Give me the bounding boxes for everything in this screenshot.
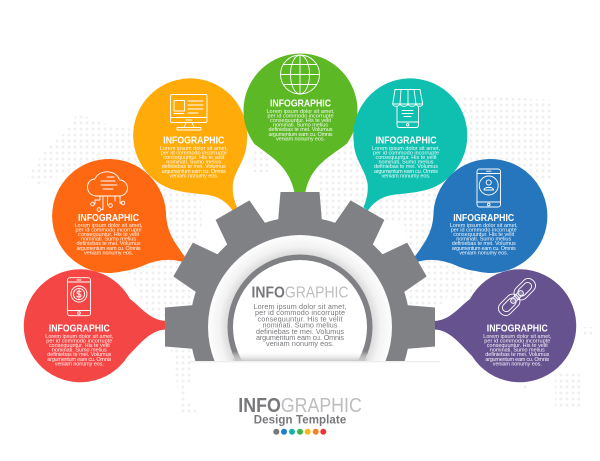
blue pin shape bbox=[412, 159, 547, 273]
heading: INFOGRAPHIC bbox=[270, 97, 331, 109]
panel: purple step bbox=[434, 269, 576, 382]
purple pin shape bbox=[434, 269, 576, 382]
text block: veniam nonumy eos. bbox=[84, 250, 133, 256]
text block bbox=[74, 223, 143, 256]
text block: veniam nonumy eos. bbox=[169, 173, 219, 179]
text block: consequuntur. His te velit bbox=[163, 155, 225, 161]
text block: argumentum eam cu. Omnis bbox=[76, 246, 141, 252]
gear text block: nominati. Sumo melius bbox=[262, 321, 338, 330]
icon: shop storefront bbox=[393, 90, 423, 128]
icon: globe bbox=[280, 55, 320, 94]
text block: nominati. Sumo melius bbox=[378, 160, 434, 166]
text block: definiebas te mei. Volumus bbox=[485, 352, 550, 358]
text block: per id commodo incorrupte bbox=[484, 339, 550, 345]
text block: veniam nonumy eos. bbox=[382, 173, 431, 179]
panel: amber step bbox=[133, 78, 247, 211]
panel: teal step bbox=[353, 78, 467, 211]
text block: definiebas te mei. Volumus bbox=[76, 241, 141, 247]
panel: green step bbox=[244, 54, 358, 195]
gear text block: argumentum eam cu. Omnis bbox=[256, 333, 344, 342]
text block: argumentum eam cu. Omnis bbox=[162, 169, 226, 175]
text block: consequuntur. His te velit bbox=[376, 155, 437, 161]
gear text block: Lorem ipsum dolor sit amet, bbox=[254, 302, 346, 311]
text block: argumentum eam cu. Omnis bbox=[268, 132, 333, 138]
text block: definiebas te mei. Volumus bbox=[268, 127, 333, 133]
text block bbox=[45, 334, 114, 367]
text block: per id commodo incorrupte bbox=[373, 151, 439, 157]
text block: definiebas te mei. Volumus bbox=[452, 241, 516, 247]
text block: nominati. Sumo melius bbox=[81, 237, 136, 243]
text block bbox=[483, 334, 552, 367]
gear text block bbox=[254, 302, 346, 348]
text block: definiebas te mei. Volumus bbox=[47, 352, 112, 358]
text block bbox=[266, 109, 335, 142]
icon: phone with user bbox=[477, 169, 500, 207]
text block: consequuntur. His te velit bbox=[49, 343, 110, 349]
text block: Lorem ipsum dolor sit amet, bbox=[450, 223, 518, 229]
text block: per id commodo incorrupte bbox=[268, 114, 334, 120]
gear text block: consequuntur. His te velit bbox=[258, 314, 342, 323]
text block: argumentum eam cu. Omnis bbox=[374, 169, 438, 175]
gear text block: definiebas te mei. Volumus bbox=[256, 327, 344, 336]
text block: argumentum eam cu. Omnis bbox=[452, 246, 516, 252]
text block: consequuntur. His te velit bbox=[487, 343, 548, 349]
orange pin shape bbox=[52, 159, 187, 273]
icon: desktop monitor bbox=[170, 94, 207, 130]
text block: veniam nonumy eos. bbox=[493, 361, 542, 367]
heading: INFOGRAPHIC bbox=[453, 212, 515, 224]
gear text block: veniam nonumy eos. bbox=[266, 339, 334, 348]
text block: definiebas te mei. Volumus bbox=[374, 164, 438, 170]
text block: Lorem ipsum dolor sit amet, bbox=[74, 223, 143, 229]
red pin shape bbox=[24, 269, 166, 382]
heading: INFOGRAPHIC bbox=[163, 134, 225, 146]
heading: INFOGRAPHIC bbox=[78, 212, 139, 224]
text block: per id commodo incorrupte bbox=[46, 339, 112, 345]
gear base shadow bbox=[190, 361, 440, 364]
footer subtitle: Design Template bbox=[254, 414, 346, 426]
green pin shape bbox=[244, 54, 358, 195]
text block: veniam nonumy eos. bbox=[459, 250, 509, 256]
text block: per id commodo incorrupte bbox=[161, 151, 227, 157]
background dotted world map bbox=[27, 95, 592, 414]
text block: consequuntur. His te velit bbox=[453, 232, 515, 238]
text block: argumentum eam cu. Omnis bbox=[47, 357, 112, 363]
text block: per id commodo incorrupte bbox=[451, 228, 517, 234]
text block: Lorem ipsum dolor sit amet, bbox=[266, 109, 335, 115]
text block: nominati. Sumo melius bbox=[273, 123, 328, 129]
text block: Lorem ipsum dolor sit amet, bbox=[160, 146, 228, 152]
text block: per id commodo incorrupte bbox=[76, 228, 142, 234]
text block: Lorem ipsum dolor sit amet, bbox=[45, 334, 114, 340]
heading: INFOGRAPHIC bbox=[487, 322, 548, 334]
gear heading: INFOGRAPHIC bbox=[252, 284, 348, 302]
text block bbox=[372, 146, 440, 179]
text block: argumentum eam cu. Omnis bbox=[485, 357, 550, 363]
central gear bbox=[165, 192, 435, 361]
panel: orange step bbox=[52, 159, 187, 273]
panel: red step bbox=[24, 269, 166, 382]
text block: definiebas te mei. Volumus bbox=[162, 164, 226, 170]
text block: nominati. Sumo melius bbox=[52, 348, 107, 354]
footer title: INFOGRAPHIC bbox=[238, 395, 362, 417]
amber pin shape bbox=[133, 78, 247, 211]
icon: chain link bbox=[496, 276, 538, 318]
text block: Lorem ipsum dolor sit amet, bbox=[483, 334, 552, 340]
text block: nominati. Sumo melius bbox=[490, 348, 545, 354]
colour dots bbox=[273, 429, 326, 435]
text block bbox=[160, 146, 228, 179]
heading: INFOGRAPHIC bbox=[376, 134, 437, 146]
teal pin shape bbox=[353, 78, 467, 211]
panel: blue step bbox=[412, 159, 547, 273]
heading: INFOGRAPHIC bbox=[49, 322, 110, 334]
text block: veniam nonumy eos. bbox=[55, 361, 104, 367]
text block bbox=[450, 223, 518, 256]
text block: Lorem ipsum dolor sit amet, bbox=[372, 146, 440, 152]
text block: consequuntur. His te velit bbox=[270, 118, 331, 124]
text block: nominati. Sumo melius bbox=[456, 237, 511, 243]
text block: veniam nonumy eos. bbox=[276, 136, 325, 142]
icon: cloud network bbox=[88, 172, 128, 211]
text block: consequuntur. His te velit bbox=[78, 232, 139, 238]
gear text block: per id commodo incorrupte bbox=[255, 308, 345, 317]
icon: phone with dollar bbox=[68, 278, 90, 316]
text block: nominati. Sumo melius bbox=[166, 160, 222, 166]
